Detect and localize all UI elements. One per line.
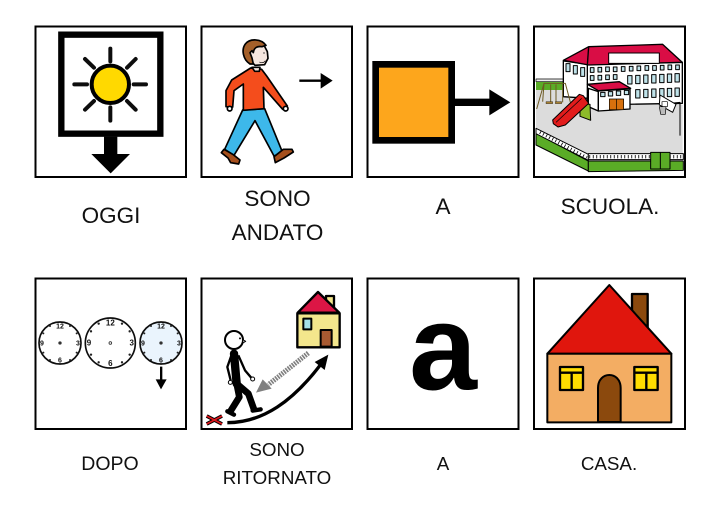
icon: three clocks with down arrow: 3 [76, 340, 80, 347]
icon: sun in frame with down arrow [61, 35, 160, 173]
label: SONO RITORNATO: SONO [249, 439, 305, 460]
icon: three clocks with down arrow [39, 318, 182, 389]
card: scuola symbol [534, 26, 685, 177]
icon: three clocks with down arrow: 6 [159, 357, 163, 364]
icon: three clocks with down arrow: 3 [177, 340, 181, 347]
card: casa symbol [534, 278, 685, 429]
label: SONO ANDATO: ANDATO [232, 220, 323, 245]
label: DOPO: DOPO [81, 453, 139, 475]
icon: letter a: a [409, 280, 478, 416]
icon: three clocks with down arrow: 9 [141, 340, 145, 347]
label: SONO ANDATO: SONO [244, 186, 311, 211]
icon: three clocks with down arrow: 6 [58, 357, 62, 364]
card: dopo symbol [36, 278, 186, 429]
label: SONO RITORNATO: RITORNATO [223, 467, 331, 488]
icon: three clocks with down arrow: 3 [129, 339, 134, 348]
icon: house [547, 285, 671, 422]
icon: three clocks with down arrow: 9 [87, 339, 92, 348]
icon: three clocks with down arrow: 9 [40, 340, 44, 347]
label: SCUOLA.: SCUOLA. [561, 194, 659, 219]
icon: walking boy with arrow [221, 40, 333, 164]
label: OGGI: OGGI [82, 203, 140, 228]
icon: orange square with arrow [376, 64, 510, 140]
label: CASA.: CASA. [581, 453, 637, 474]
card: a symbol [368, 26, 518, 177]
label: SONO RITORNATO [223, 439, 331, 488]
card: sono ritornato symbol [202, 278, 352, 429]
card: letter a symbol [368, 278, 518, 429]
card: sono andato symbol [202, 26, 352, 177]
card: oggi symbol [36, 26, 186, 177]
label: A: A [435, 194, 451, 219]
label: A: A [437, 453, 450, 474]
label: SONO ANDATO [232, 186, 323, 245]
icon: three clocks with down arrow: 12 [106, 319, 115, 328]
icon: stick figure returning home [207, 292, 340, 424]
icon: three clocks with down arrow: 6 [108, 359, 113, 368]
icon: three clocks with down arrow: 12 [157, 324, 165, 331]
icon: school with playground [536, 44, 683, 172]
icon: three clocks with down arrow: 12 [56, 324, 64, 331]
